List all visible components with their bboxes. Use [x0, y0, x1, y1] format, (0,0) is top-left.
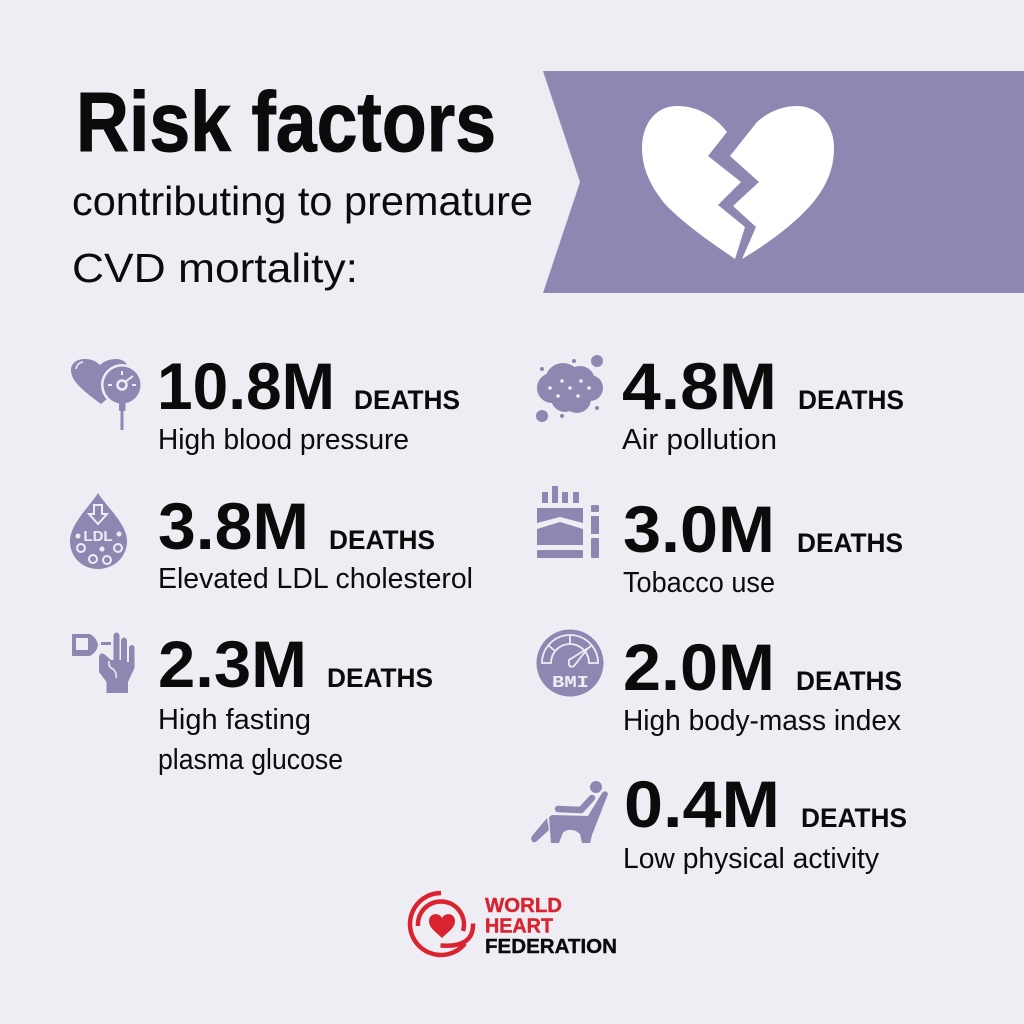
icon: BMI gauge: BMI [552, 674, 589, 693]
icon: glucose meter and hand [72, 632, 134, 693]
deaths label: DEATHS [797, 528, 903, 558]
value: 10.8M [157, 349, 335, 423]
value: 2.3M [158, 627, 307, 701]
title: Risk factors [76, 75, 496, 169]
icon: LDL blood drop: LDL [83, 528, 113, 545]
description: Air pollution [622, 424, 777, 456]
stat: high body-mass index [536, 630, 902, 737]
deaths label: DEATHS [798, 385, 904, 415]
subtitle line 1: contributing to premature [72, 178, 533, 224]
subtitle line 2: CVD mortality: [72, 245, 358, 291]
description: Tobacco use [623, 567, 775, 599]
deaths label: DEATHS [796, 666, 902, 696]
icon: BMI gauge [536, 630, 604, 696]
icon: pollution cloud [536, 355, 603, 422]
logo word: FEDERATION: FEDERATION [485, 935, 617, 958]
description: High body-mass index [623, 705, 901, 737]
logo: World Heart Federation [410, 893, 617, 958]
stat: high fasting plasma glucose [72, 627, 433, 776]
value: 4.8M [622, 349, 777, 423]
deaths label: DEATHS [329, 525, 435, 555]
value: 3.8M [158, 489, 309, 563]
deaths label: DEATHS [354, 385, 460, 415]
stat: elevated LDL cholesterol [70, 489, 473, 595]
icon: broken heart [642, 106, 834, 259]
stat: air pollution [536, 349, 904, 456]
logo word: HEART: HEART [485, 914, 553, 938]
stat: high blood pressure [71, 349, 460, 456]
value: 3.0M [623, 492, 775, 566]
logo word: WORLD: WORLD [485, 894, 562, 917]
stat: low physical activity [531, 767, 907, 875]
stat: tobacco use [537, 486, 903, 599]
icon: LDL blood drop [70, 493, 127, 569]
icon: person in reclining chair [531, 781, 608, 843]
banner with broken heart [543, 71, 1024, 293]
deaths label: DEATHS [801, 803, 907, 833]
icon: cigarette pack [537, 486, 599, 558]
deaths label: DEATHS [327, 663, 433, 693]
description: Low physical activity [623, 843, 879, 875]
value: 0.4M [624, 767, 780, 841]
description: High blood pressure [158, 424, 409, 456]
icon: logo mark [410, 893, 473, 955]
description: Elevated LDL cholesterol [158, 563, 473, 595]
description line 2: plasma glucose [158, 744, 343, 776]
header title block [72, 75, 533, 291]
description: High fasting [158, 704, 311, 736]
icon: heart with gauge [71, 359, 143, 430]
value: 2.0M [623, 630, 775, 704]
